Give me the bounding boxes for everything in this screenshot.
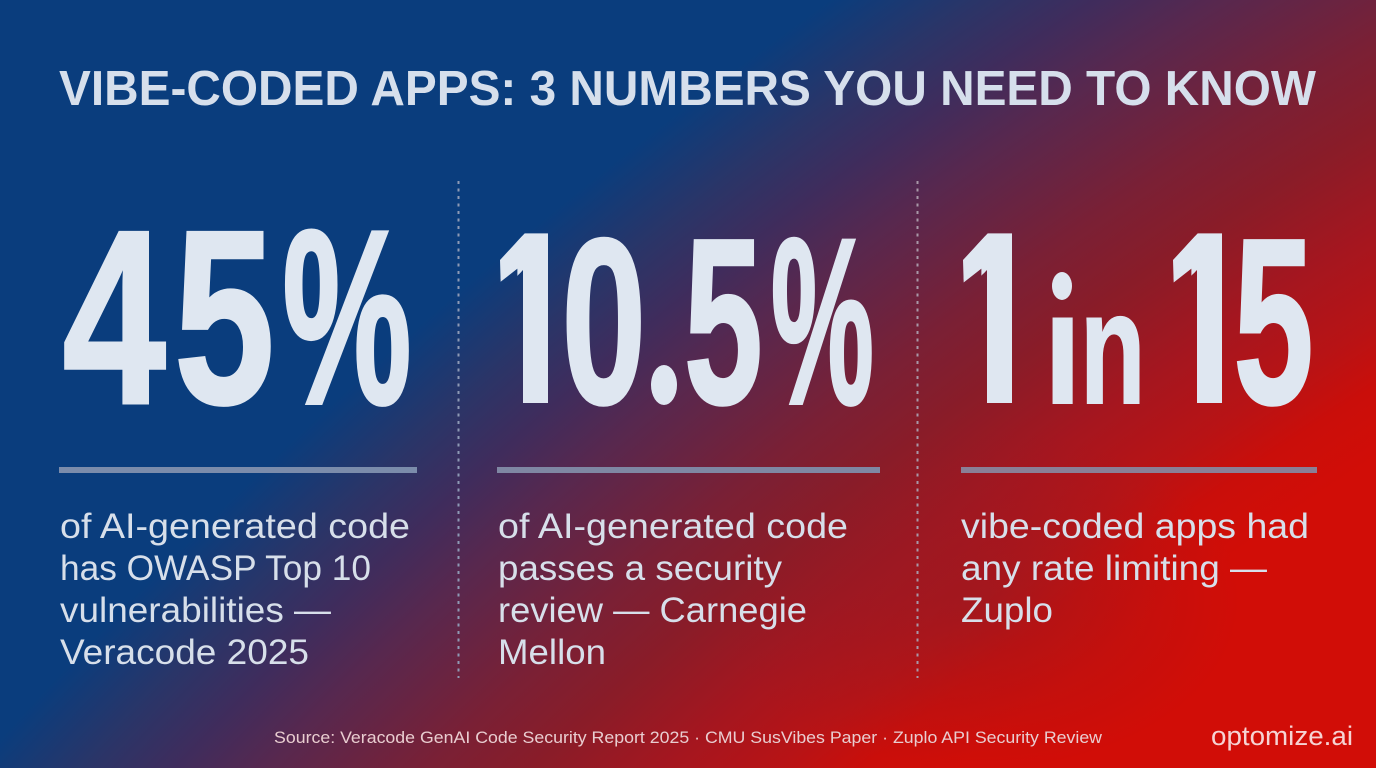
source line: Source: Veracode GenAI Code Security Report 2025 · CMU SusVibes Paper · Zuplo API Security Review <box>274 728 1103 747</box>
big number: 10.5% <box>500 233 872 407</box>
big number: 45% <box>62 179 411 457</box>
description: vulnerabilities — <box>60 591 331 630</box>
description: vibe-coded apps had <box>961 507 1309 546</box>
panel: 10.5 percent statistic <box>497 233 880 664</box>
rule <box>961 467 1317 473</box>
description: of AI-generated code <box>60 507 410 546</box>
big number: 1 in 15: 5 <box>1234 191 1314 454</box>
big number: 45%: % <box>282 180 411 457</box>
rule <box>59 467 417 473</box>
big number: 10.5%: % <box>771 191 874 454</box>
description: Zuplo <box>961 591 1053 630</box>
divider <box>916 181 918 678</box>
description: review — Carnegie <box>498 591 807 630</box>
big number: 1 in 15: i <box>1044 259 1081 438</box>
description: of AI-generated code <box>498 507 848 546</box>
title: VIBE-CODED APPS: 3 NUMBERS YOU NEED TO KNOW <box>59 62 1317 116</box>
big number: 1 in 15 <box>963 233 1310 407</box>
description: passes a security <box>498 549 783 588</box>
panel: 45 percent statistic <box>59 179 417 672</box>
panel: 1 in 15 statistic <box>961 233 1317 630</box>
description: Mellon <box>498 633 606 672</box>
big number: 1 in 15: n <box>1080 258 1145 437</box>
big number: 45%: 5 <box>174 179 275 457</box>
description: has OWASP Top 10 <box>60 549 371 588</box>
big number: 10.5%: 5 <box>684 191 763 454</box>
brand: optomize.ai: optomize.ai <box>1211 721 1353 751</box>
big number: 45%: 4 <box>62 180 166 456</box>
description: any rate limiting — <box>961 549 1267 588</box>
big number: 1 in 15: 1 <box>1148 183 1256 455</box>
divider <box>458 181 460 678</box>
big number: 10.5%: . <box>634 133 692 472</box>
description: Veracode 2025 <box>60 633 309 672</box>
big number: 10.5%: 1 <box>474 183 582 455</box>
rule <box>497 467 880 473</box>
big number: 1 in 15: 1 <box>938 183 1046 455</box>
big number: 10.5%: 0 <box>562 190 646 454</box>
